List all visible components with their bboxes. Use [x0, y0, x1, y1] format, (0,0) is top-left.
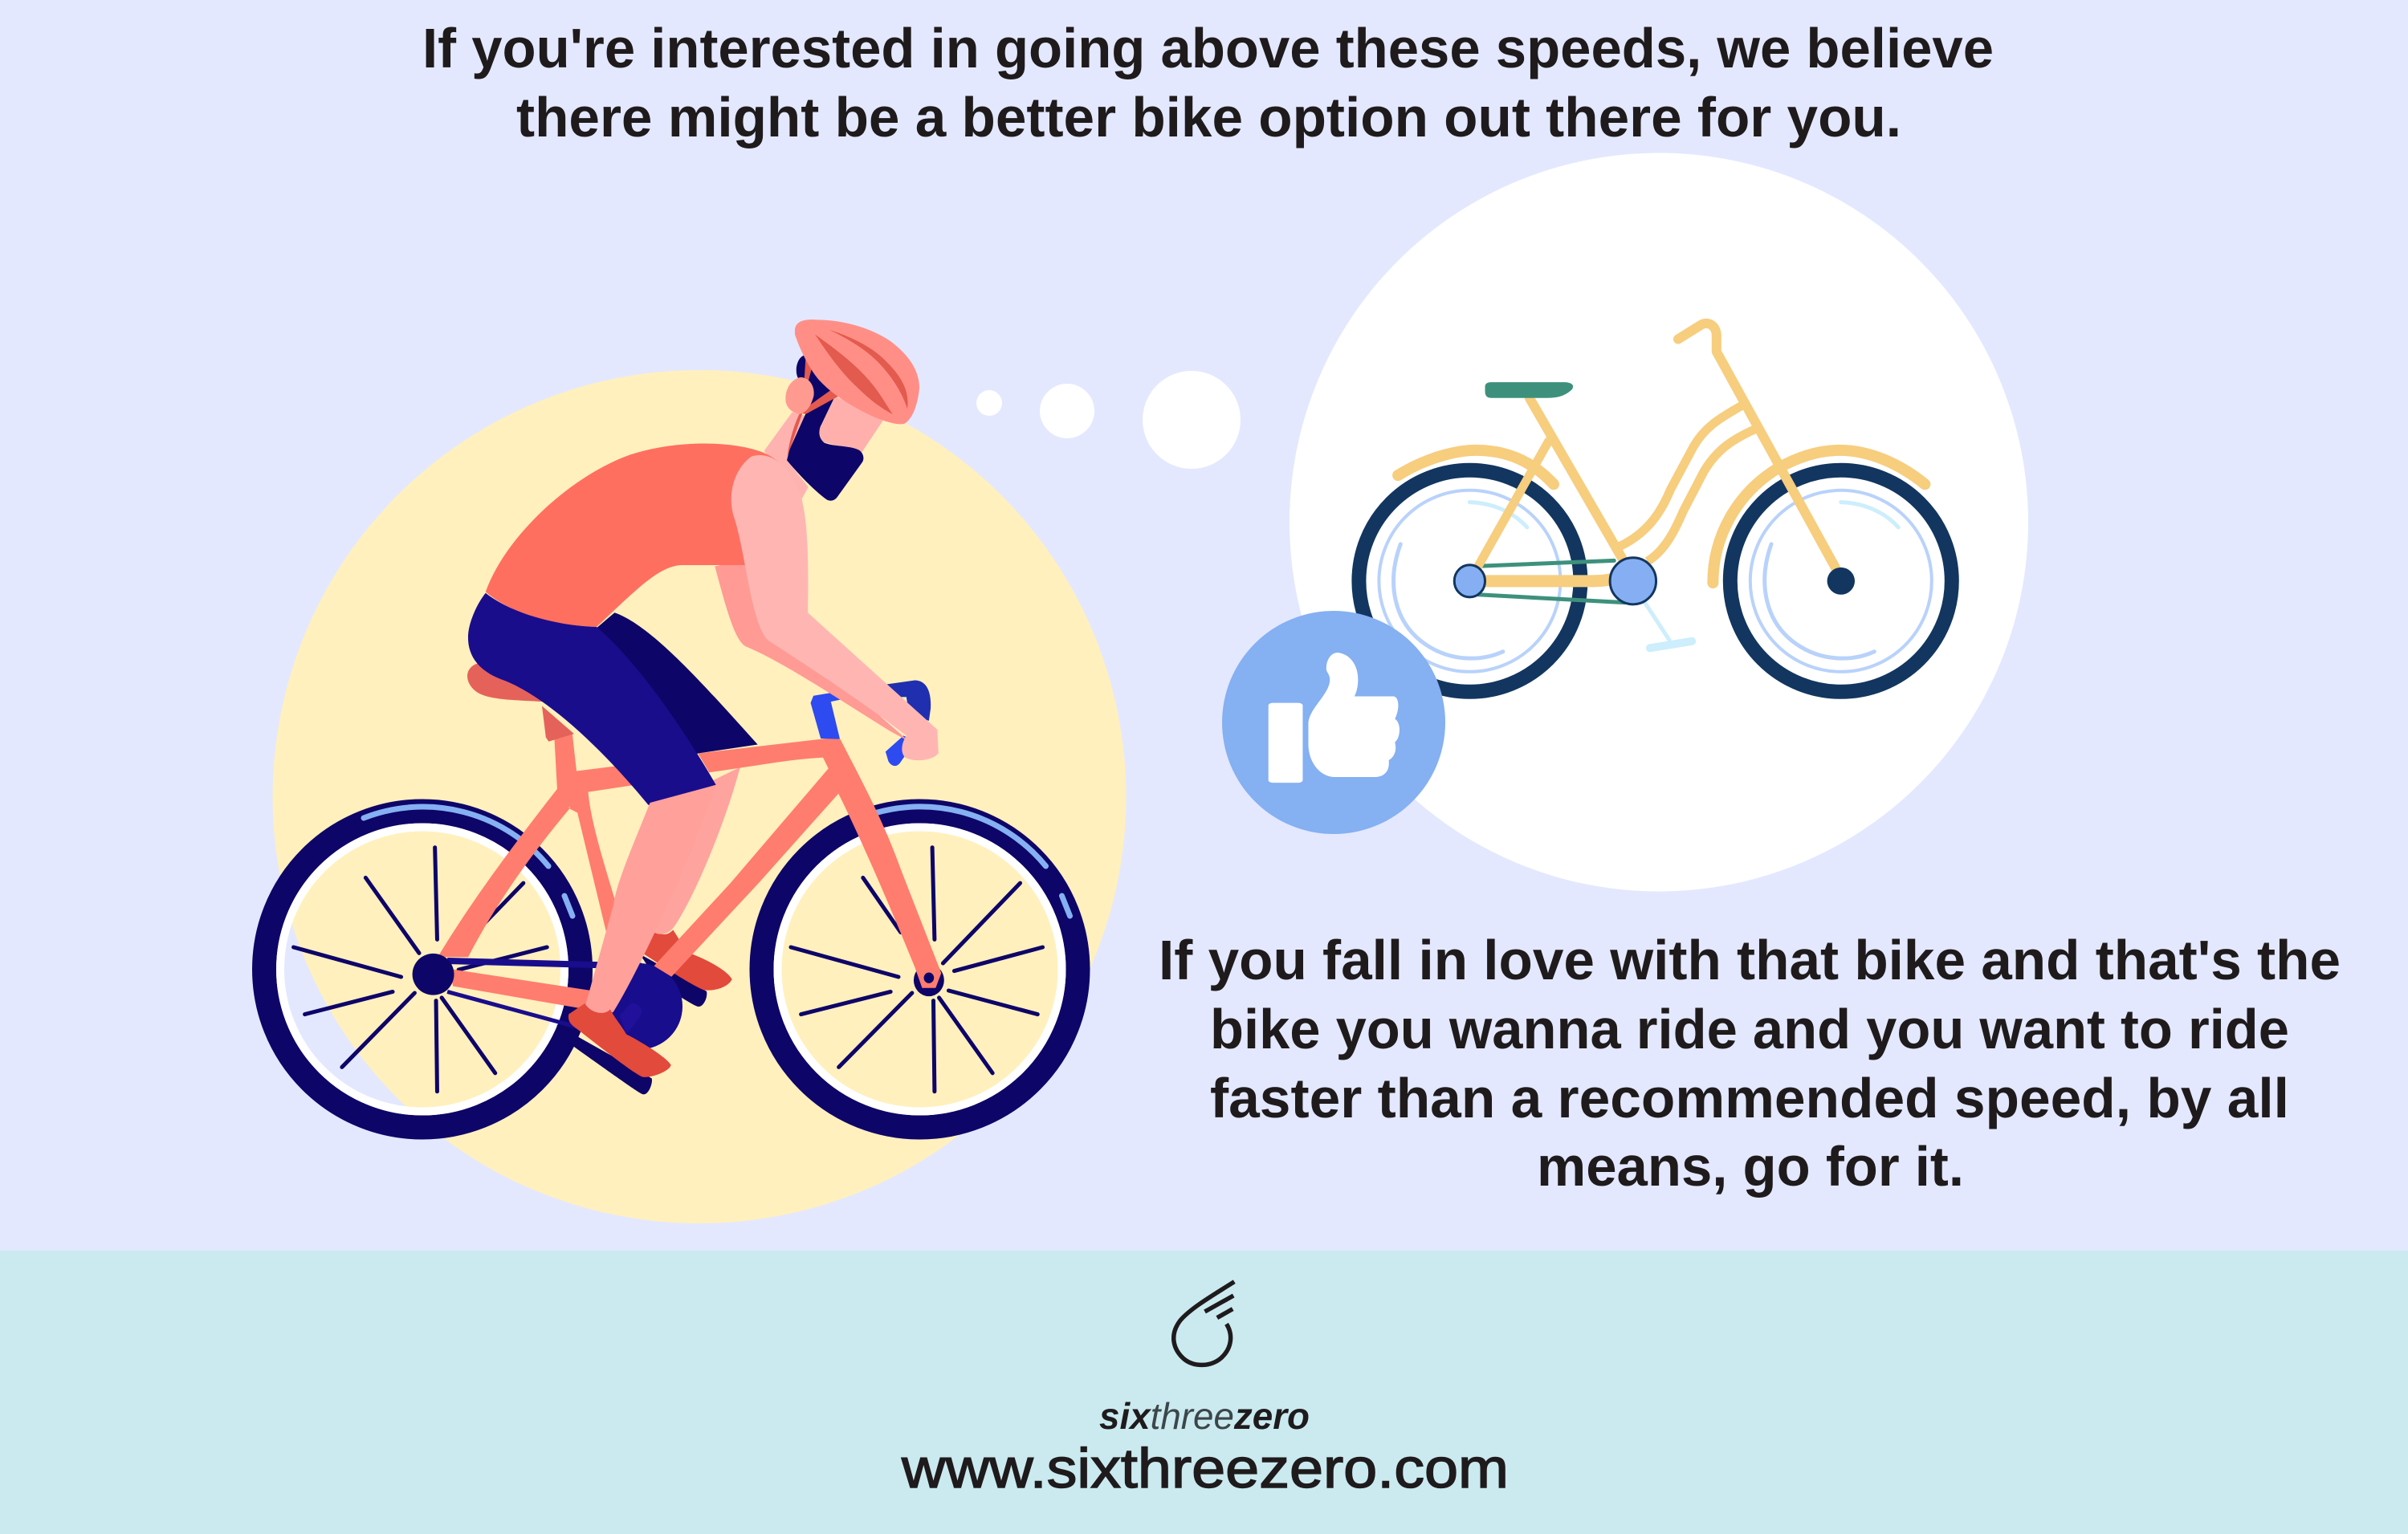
- illustration: cyclist: [264, 319, 1078, 1127]
- panel: yellow circle behind cyclist: [273, 370, 1126, 1223]
- shorts: [468, 593, 758, 805]
- bike frame, fenders, seat: [1394, 323, 1925, 658]
- heading: top message: [422, 17, 1994, 149]
- logo wordmark: sixthreezero: [1099, 1395, 1310, 1437]
- text block: love that bike message: faster than a recommended speed, by all: [1210, 1067, 2289, 1129]
- bike frame: [413, 734, 944, 1010]
- text block: love that bike message: If you fall in love with that bike and that's the: [1159, 929, 2341, 991]
- near arm and hand: [731, 455, 939, 760]
- rear wheel: [264, 807, 581, 1127]
- torso: sleeveless jersey: [486, 443, 802, 627]
- near leg: [585, 785, 716, 1014]
- illustration: cruiser bike in thought bubble: [1359, 323, 1952, 692]
- far crank, shoe, chainring: [597, 930, 732, 1049]
- text block: love that bike message: bike you wanna ride and you want to ride: [1210, 998, 2289, 1060]
- icon: small thought dots: [976, 371, 1241, 469]
- neck: [764, 412, 811, 502]
- text block: love that bike message: [1159, 929, 2341, 1198]
- bike wheels: [1359, 470, 1952, 692]
- wheel spokes and chain: [294, 848, 1043, 1092]
- far leg: [647, 767, 740, 934]
- saddle: [467, 661, 574, 742]
- text block: love that bike message: means, go for it.: [1537, 1135, 1964, 1198]
- head with helmet and beard: [785, 319, 919, 501]
- icon: sixthreezero wing logo: [1174, 1282, 1234, 1365]
- near crank and shoe: [556, 1003, 671, 1094]
- panel: white thought bubble: [1290, 153, 2028, 891]
- heading: top message: there might be a better bike option out there for you.: [516, 86, 1901, 149]
- far arm: [715, 560, 909, 742]
- front wheel: [761, 807, 1078, 1127]
- website url: www.sixthreezero.com: [901, 1437, 1509, 1499]
- footer band: [0, 1251, 2408, 1534]
- icon: thumbs up badge: [1222, 611, 1445, 834]
- handlebar: [811, 681, 931, 766]
- heading: top message: If you're interested in going above these speeds, we believe: [422, 17, 1994, 79]
